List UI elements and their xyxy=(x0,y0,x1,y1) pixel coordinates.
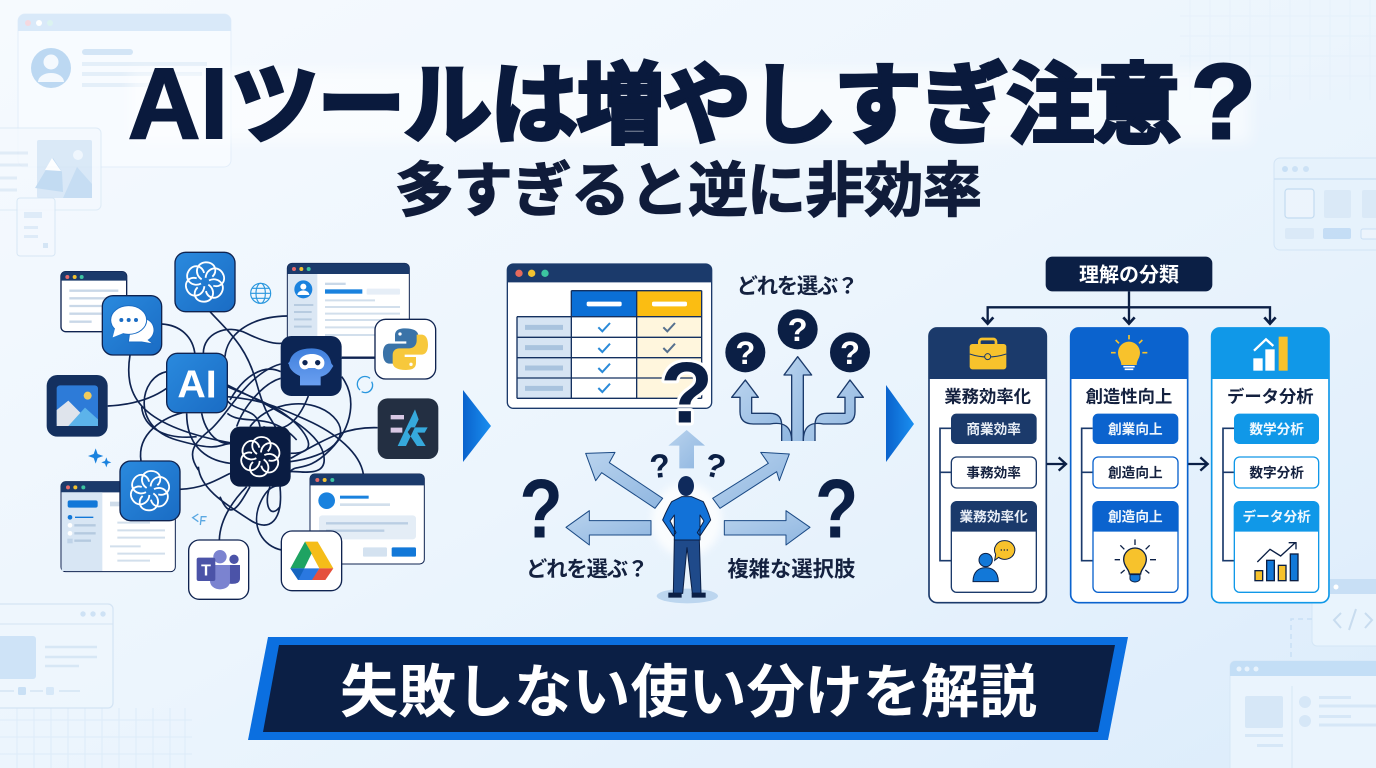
arrow: left to middle xyxy=(463,390,491,462)
title latin part: AI xyxy=(128,48,228,160)
person xyxy=(657,476,718,603)
panel: complex choices xyxy=(507,264,870,603)
icon: bar chart xyxy=(1253,337,1288,371)
subtitle: 多すぎると逆に非効率 xyxy=(395,158,982,224)
person glow xyxy=(652,483,722,557)
connector arrows xyxy=(982,291,1276,324)
big question above person: ? xyxy=(660,345,713,441)
item: filled: 創業向上 xyxy=(1108,421,1163,437)
item: outlined: 数字分析 xyxy=(1249,465,1304,481)
card: business efficiency xyxy=(929,328,1046,603)
icon: python xyxy=(375,319,436,379)
panel: tangled AI tools xyxy=(47,252,438,599)
tree connector xyxy=(1223,428,1234,561)
icon: chat bubbles xyxy=(102,296,162,355)
question marks: ? xyxy=(648,447,672,486)
icon: sync arrows xyxy=(357,376,373,393)
banner outer blue xyxy=(248,637,1128,740)
icon: globe xyxy=(251,283,271,303)
icon: Teams: T xyxy=(201,563,211,580)
item: outlined xyxy=(951,457,1036,488)
card: creativity: 創造性向上 xyxy=(1086,387,1172,407)
window: sidebar list xyxy=(61,482,175,572)
background decoration: code window xyxy=(1291,579,1376,661)
tangled connection lines xyxy=(108,312,378,550)
item: with icon xyxy=(951,502,1036,592)
question circles: ? xyxy=(735,334,755,371)
icon: assistant head xyxy=(281,336,342,396)
icon: OpenAI blue top xyxy=(175,252,235,312)
icon: K app xyxy=(378,398,438,459)
top label: どれを選ぶ？ xyxy=(737,275,858,299)
radiating arrows xyxy=(566,430,810,545)
card: business efficiency: 業務効率化 xyxy=(944,387,1031,407)
right label: 複雑な選択肢 xyxy=(727,558,855,582)
icon: lightbulb xyxy=(1111,335,1147,369)
icon: OpenAI dark xyxy=(230,427,291,487)
item: with icon: データ分析 xyxy=(1243,509,1311,525)
heading box: 理解の分類 xyxy=(1079,264,1179,287)
item: filled xyxy=(1234,414,1319,444)
icon: Google Drive xyxy=(281,531,342,591)
background decoration: right layout window xyxy=(1274,158,1376,250)
heading box xyxy=(1046,257,1212,291)
title xyxy=(128,43,1256,161)
card: data analysis: データ分析 xyxy=(1227,387,1314,407)
question marks: ? xyxy=(815,463,858,556)
item: outlined xyxy=(1093,457,1178,488)
question circles: ? xyxy=(788,311,808,348)
window: form xyxy=(310,474,424,564)
item: with icon: 創造向上 xyxy=(1108,509,1163,525)
background decoration: image card xyxy=(0,128,101,210)
item: outlined xyxy=(1234,457,1319,488)
arrow: card 1 to 2 xyxy=(1047,457,1066,471)
question circles xyxy=(725,309,870,372)
tree connector xyxy=(1082,428,1093,561)
window: notes xyxy=(61,272,127,332)
question marks xyxy=(519,446,858,556)
item: outlined: 創造向上 xyxy=(1108,465,1163,481)
background decoration: top-left profile window xyxy=(18,14,231,167)
icon: OpenAI blue lower xyxy=(120,461,180,521)
icon: AI badge: AI xyxy=(177,362,217,406)
question circles: ? xyxy=(840,334,860,371)
icon: image xyxy=(47,375,108,437)
item: with icon: 業務効率化 xyxy=(960,509,1028,525)
background decoration: small phone card xyxy=(17,198,55,256)
arrow: middle to right xyxy=(886,385,914,462)
title white glow xyxy=(130,70,1250,142)
item: outlined: 事務効率 xyxy=(966,465,1021,481)
question marks: ? xyxy=(701,446,729,487)
title question mark: ? xyxy=(1191,43,1256,161)
panel: classification xyxy=(929,257,1329,603)
arrow: card 2 to 3 xyxy=(1188,457,1208,471)
banner inner navy xyxy=(263,645,1115,732)
icon: small glyph xyxy=(193,514,207,525)
item: with icon xyxy=(1234,502,1319,592)
comparison table window xyxy=(507,264,712,408)
title japanese part: ツールは増やしすぎ注意 xyxy=(231,56,1181,155)
background decoration: bottom-right window xyxy=(1230,661,1376,768)
banner xyxy=(248,637,1128,740)
item: with icon xyxy=(1093,502,1178,592)
branching arrows xyxy=(732,357,863,441)
window: profile xyxy=(287,263,409,358)
banner text: 失敗しない使い分けを解説 xyxy=(340,660,1037,725)
tree connector xyxy=(940,428,951,561)
card: data analysis xyxy=(1212,328,1329,603)
icon: AI badge xyxy=(167,353,227,413)
question marks: ? xyxy=(519,463,563,556)
card: creativity xyxy=(1071,328,1188,603)
icon: Teams xyxy=(189,540,249,599)
item: filled xyxy=(1093,414,1178,444)
icon: sparkles xyxy=(88,448,111,467)
icon: briefcase xyxy=(970,339,1006,369)
left label: どれを選ぶ？ xyxy=(526,558,648,582)
background decoration: bottom-left window xyxy=(0,604,113,708)
item: filled xyxy=(951,414,1037,444)
item: filled: 商業効率 xyxy=(966,421,1021,437)
item: filled: 数学分析 xyxy=(1249,421,1304,437)
